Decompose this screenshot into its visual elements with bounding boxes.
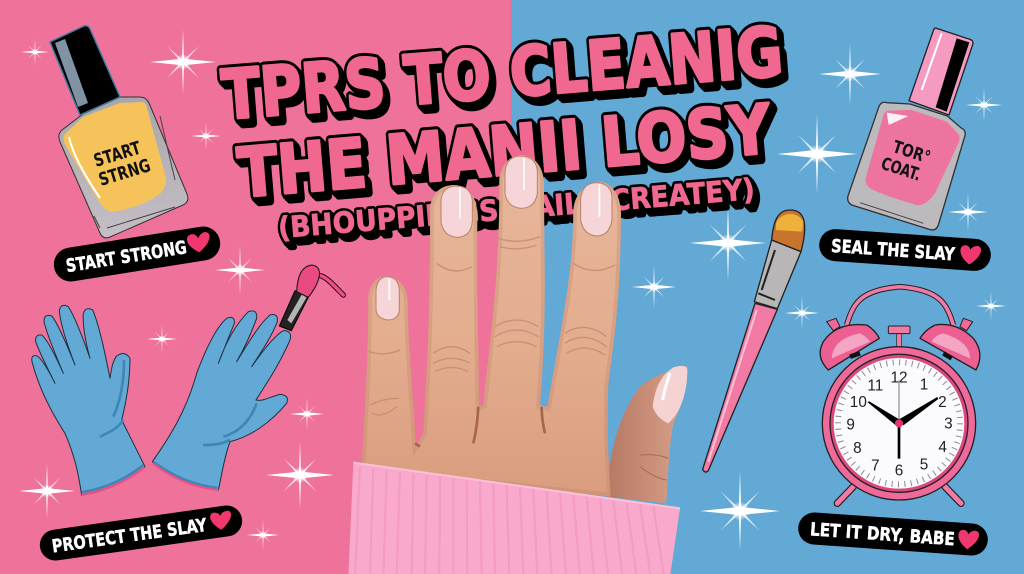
sweater cuff [348, 463, 680, 574]
alarm clock: 7 [871, 457, 880, 474]
background: pink left panel [0, 0, 511, 574]
title: TPRS TO CLEANIG [219, 13, 786, 136]
title: THE MANII LOSY [235, 90, 774, 214]
pill: start strong [51, 224, 223, 284]
pink top coat bottle [848, 28, 973, 230]
clock hands [897, 380, 900, 423]
pill: protect the slay: PROTECT THE SLAY [51, 515, 209, 557]
pill: let it dry, babe [797, 511, 989, 557]
alarm clock: 6 [895, 463, 903, 480]
clock bells [827, 318, 973, 331]
gloves and pink brush [32, 265, 343, 495]
clock face [834, 358, 964, 489]
alarm clock: 10 [850, 394, 867, 411]
thumb [607, 366, 687, 503]
alarm clock: 1 [920, 377, 928, 394]
title: (BHOUPPIINGS MAILA CREATEY) [277, 172, 756, 245]
alarm clock: 9 [846, 416, 855, 433]
hand with sleeve [348, 155, 687, 574]
alarm clock: 8 [853, 440, 862, 457]
makeup brush [703, 210, 805, 472]
knuckles [368, 237, 615, 415]
yellow nail polish bottle [50, 26, 188, 238]
alarm clock [820, 287, 980, 503]
alarm clock: 4 [938, 439, 947, 456]
palm and fingers [362, 155, 621, 497]
clock handle [847, 287, 953, 325]
bottle label: start strng: START [91, 138, 144, 172]
alarm clock: 11 [867, 377, 883, 394]
yellow nail polish bottle: STRNG [96, 155, 153, 191]
icon: heart [186, 231, 212, 254]
alarm clock: 12 [890, 370, 908, 387]
title: THE MANII LOSY [235, 90, 774, 214]
title: TPRS TO CLEANIG [219, 13, 786, 136]
pill: start strong: START STRONG [64, 237, 188, 277]
title [219, 13, 786, 245]
background: blue right panel [511, 0, 1024, 574]
alarm clock: 5 [920, 457, 928, 474]
icon: right glove [152, 311, 291, 490]
icon: heart [957, 530, 979, 550]
icon: pink brush [279, 265, 343, 331]
pill: let it dry, babe: LET IT DRY, BABE [809, 519, 955, 550]
title: (BHOUPPIINGS MAILA CREATEY) [277, 172, 756, 245]
clock legs [837, 487, 961, 503]
pill: seal the slay [818, 228, 992, 272]
pill: seal the slay: SEAL THE SLAY [830, 236, 956, 266]
icon: heart [210, 510, 233, 531]
pink top coat bottle: COAT. [878, 154, 923, 186]
fingernails [376, 156, 612, 320]
icon: heart [959, 245, 981, 265]
alarm clock: 2 [938, 394, 947, 411]
bottle label: top coat: TOR° [890, 137, 933, 168]
alarm clock: 3 [944, 416, 953, 433]
icon: left glove [32, 305, 145, 495]
clock case [822, 347, 976, 500]
